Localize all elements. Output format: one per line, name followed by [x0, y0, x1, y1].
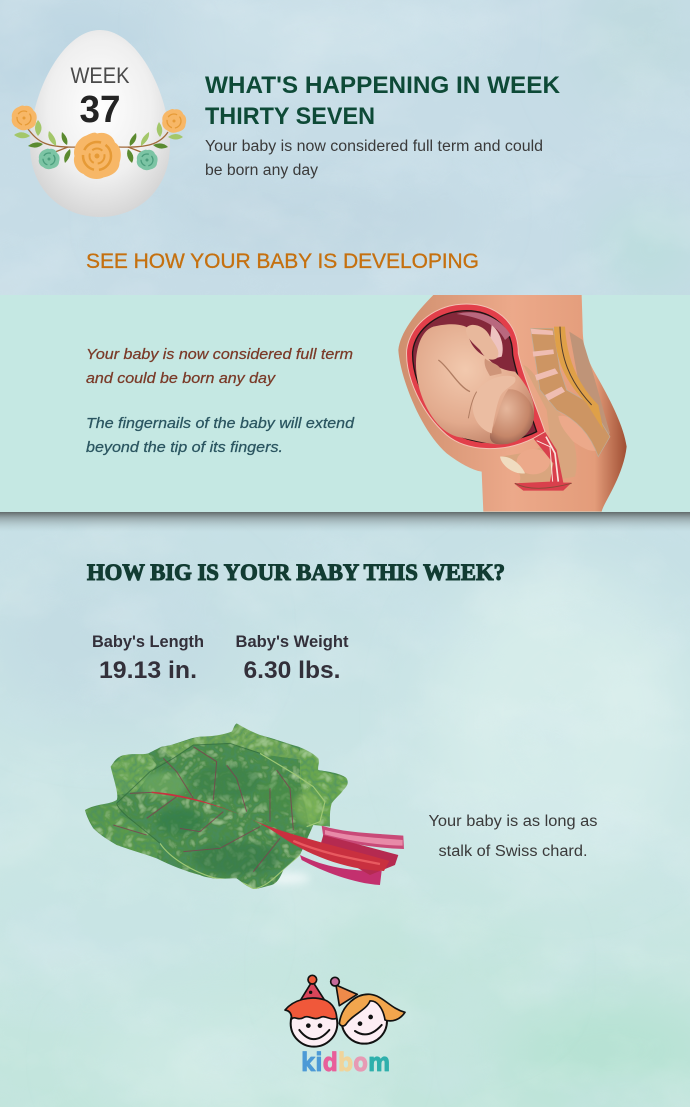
development fact one: and could be born any day: [86, 370, 277, 387]
panel background: [0, 295, 690, 512]
stat: baby's length: 19.13 in.: [99, 657, 197, 684]
comparison text: Your baby is as long as: [428, 813, 598, 830]
wordmark: kidbom: [301, 1047, 390, 1077]
birth canal: [514, 432, 572, 491]
stat: baby's weight: [236, 632, 349, 684]
leaf veins: [113, 747, 293, 872]
intro text: be born any day: [205, 162, 318, 179]
title: WHAT'S HAPPENING IN WEEK: [205, 72, 561, 99]
soft shadow: [263, 872, 310, 884]
stems: [322, 826, 404, 849]
boy: [285, 975, 337, 1047]
baby limbs: [473, 376, 516, 433]
egg shape: [30, 30, 170, 217]
stat: baby's length: Baby's Length: [92, 632, 204, 651]
red midrib: [152, 792, 389, 871]
logo: kidbom: [285, 975, 405, 1077]
pelvis: [500, 365, 577, 487]
baby head: [490, 389, 534, 444]
placenta: [457, 312, 511, 340]
spine: [569, 332, 610, 437]
baby arm and hand: [466, 325, 498, 360]
shadow below panel: [0, 512, 690, 532]
stat: baby's weight: 6.30 lbs.: [244, 657, 340, 684]
floral garland: [12, 106, 186, 179]
development fact two: beyond the tip of its fingers.: [86, 439, 283, 456]
heading: how big is your baby: HOW BIG IS YOUR BABY THIS WEEK?: [87, 560, 505, 585]
week label: WEEK: [70, 63, 130, 88]
stat: baby's weight: Baby's Weight: [236, 632, 349, 651]
development fact two: The fingernails of the baby will extend: [86, 415, 355, 432]
title: [205, 72, 561, 130]
illustration: swiss chard: [80, 715, 404, 895]
development fact one: [86, 346, 353, 387]
intro text: Your baby is now considered full term and could: [205, 138, 543, 155]
baby: [416, 324, 534, 444]
week number: 37: [80, 89, 120, 131]
comparison text: stalk of Swiss chard.: [438, 843, 588, 860]
intro text: [205, 138, 543, 179]
illustration: baby in womb: [398, 295, 627, 512]
comparison text: [428, 813, 598, 860]
girl: [331, 977, 405, 1044]
dark leaf separation: [117, 743, 260, 843]
light leaf edges: [160, 753, 325, 889]
back leaf tones: [300, 747, 348, 828]
title: THIRTY SEVEN: [205, 103, 375, 130]
egg badge: week 37: [12, 30, 186, 217]
body: [398, 295, 627, 512]
development fact one: Your baby is now considered full term: [86, 346, 353, 363]
stat: baby's length: [92, 632, 204, 684]
heading: see how your baby is developing: SEE HOW YOUR BABY IS DEVELOPING: [86, 250, 479, 273]
development fact two: [86, 415, 355, 456]
uterus: [407, 304, 545, 449]
leaves: [85, 724, 348, 889]
panel: development: [0, 295, 690, 532]
roses: [12, 106, 186, 179]
